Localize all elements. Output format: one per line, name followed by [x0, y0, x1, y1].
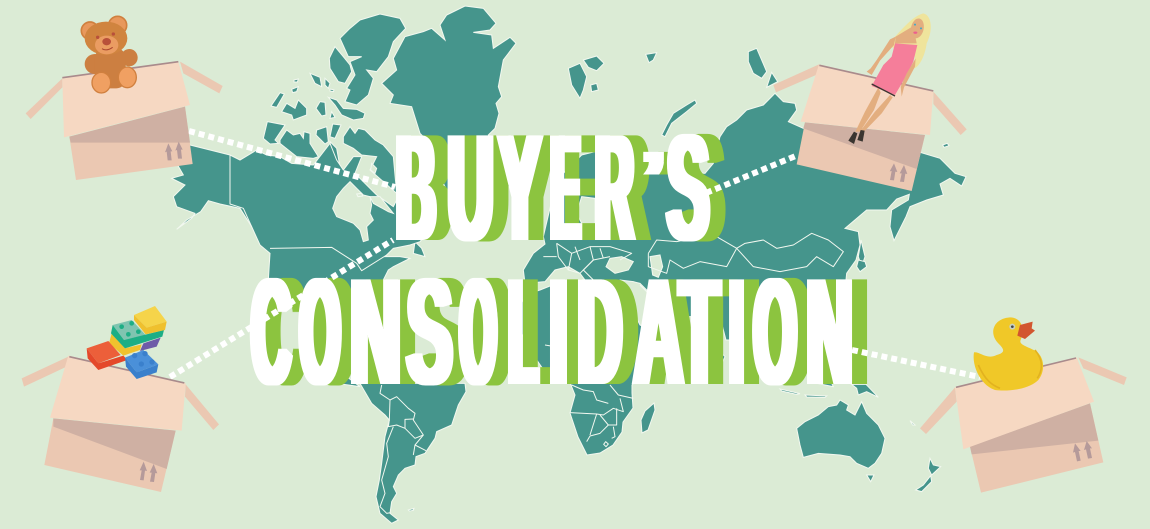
title: green shadow: O [475, 247, 511, 417]
title: white lettering [252, 103, 852, 417]
title: green shadow: I [565, 247, 582, 417]
title: white lettering: L [509, 247, 538, 417]
map: Japan [857, 143, 949, 272]
map: Middle East and Central Africa borders [545, 283, 680, 370]
title: white lettering: S [667, 103, 709, 273]
title: white lettering: B [396, 103, 436, 273]
map: African borders [570, 385, 633, 447]
icon: rubber duck [974, 317, 1043, 391]
infographic canvas: N [822, 247, 867, 417]
map: Africa [515, 282, 660, 455]
box: doll [773, 13, 967, 191]
map: South American borders [380, 385, 426, 513]
title: green shadow: A [649, 247, 698, 417]
title: white lettering: N [350, 247, 401, 417]
title: green shadow: R [610, 103, 648, 273]
title: green shadow: Y [514, 103, 556, 273]
dotted connectors [170, 131, 980, 377]
icon: teddy bear [81, 16, 138, 93]
map: North American borders [230, 155, 387, 271]
title: green shadow: L [524, 247, 553, 417]
map: Eurasia [523, 48, 966, 387]
title: green shadow: ’ [656, 135, 681, 224]
title: green shadow [266, 103, 867, 417]
icon: toy bricks [87, 306, 167, 379]
title: green shadow: N [365, 247, 416, 417]
title: green shadow: B [411, 103, 450, 273]
icon: blonde doll [848, 13, 931, 144]
title: white lettering: Y [499, 103, 541, 273]
title: green shadow: O [315, 247, 355, 417]
box: building blocks [22, 306, 219, 492]
title: white lettering: O [460, 247, 496, 417]
title: white lettering: O [300, 247, 340, 417]
map: Australia and Oceania [780, 384, 941, 492]
map: North America and Greenland [172, 6, 516, 387]
infographic canvas: N [807, 247, 852, 417]
title: white lettering: ’ [641, 135, 666, 224]
title: green shadow: O [769, 247, 811, 417]
title: green shadow: S [682, 103, 724, 273]
title: green shadow: S [422, 247, 467, 417]
box: teddy bear [26, 16, 223, 180]
title: white lettering: A [634, 247, 683, 417]
title: white lettering: T [680, 247, 719, 417]
box: rubber duck [920, 317, 1127, 493]
title: green shadow: C [266, 247, 306, 417]
title: white lettering: C [252, 247, 291, 417]
title: white lettering: I [730, 247, 743, 417]
world map [172, 6, 966, 523]
title: green shadow: E [566, 103, 595, 273]
title: white lettering: D [578, 247, 622, 417]
title: green shadow: T [695, 247, 734, 417]
title: green shadow: I [745, 247, 758, 417]
title: white lettering: S [407, 247, 452, 417]
title: white lettering: I [550, 247, 567, 417]
title: white lettering: O [754, 247, 796, 417]
map: South America [360, 383, 466, 523]
title: green shadow: U [463, 103, 508, 273]
map: Asian and European borders [543, 233, 843, 282]
title: white lettering: U [448, 103, 493, 273]
title: white lettering: E [551, 103, 580, 273]
title: green shadow: D [593, 247, 637, 417]
title: white lettering: R [596, 103, 633, 273]
